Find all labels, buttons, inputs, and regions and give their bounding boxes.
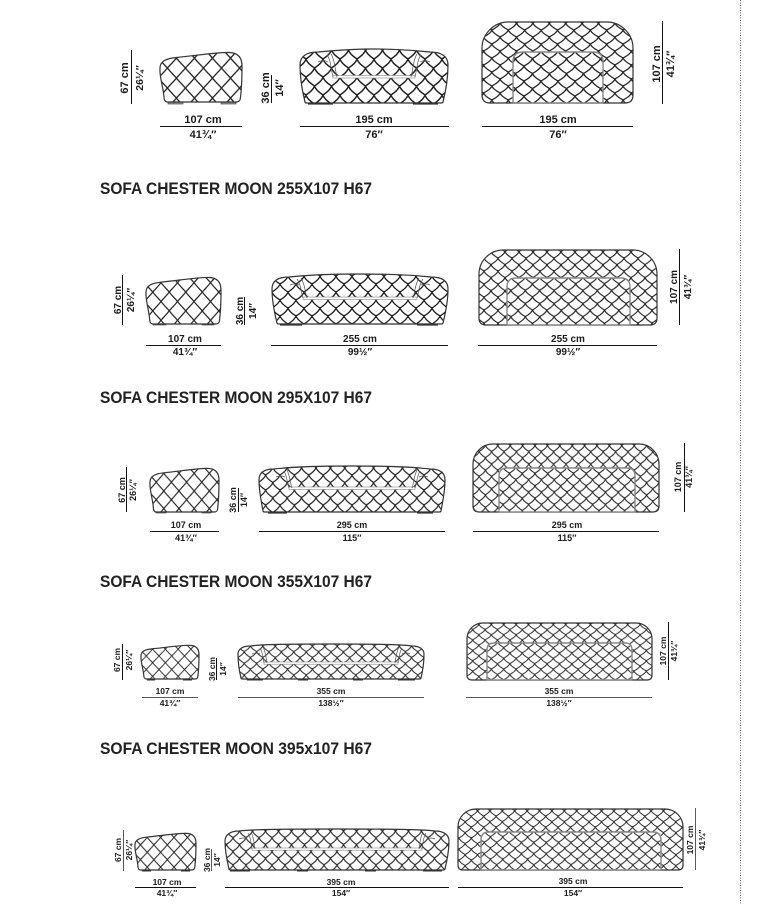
dimensions: top depth 295: 107 cm: [673, 462, 683, 492]
dimensions: side height 195: 26¼″: [134, 65, 146, 91]
dimensions: top width 255: [478, 334, 657, 358]
dimensions: front width 295: [259, 520, 445, 543]
panel: sofa 395x107 row: [113, 808, 707, 898]
dimensions: front width 255: 99½″: [348, 347, 372, 358]
heading: sofa 255: SOFA CHESTER MOON 255X107 H67: [100, 179, 372, 198]
dimensions: side height 195: 67 cm: [119, 62, 131, 94]
dimensions: front width 255: 255 cm: [343, 334, 377, 345]
heading: sofa 355: SOFA CHESTER MOON 355X107 H67: [100, 572, 372, 591]
dimensions: top depth 195: 107 cm: [651, 45, 663, 83]
dimensions: top depth 255: [669, 249, 694, 325]
dimensions: side width 395: 41¾″: [157, 888, 177, 898]
drawing: front view 195: [300, 49, 448, 105]
dimensions: top width 355: [466, 686, 652, 708]
dimensions: top depth 195: 41¾″: [665, 50, 677, 77]
dimensions: seat height 255: 36 cm: [235, 297, 246, 325]
dimensions: seat height 395: 14″: [212, 853, 222, 867]
dimensions: side height 355: [112, 644, 134, 680]
dimensions: side height 355: 67 cm: [112, 648, 122, 672]
dimensions: side height 195: [119, 50, 146, 104]
dimensions: front width 295: 295 cm: [337, 520, 367, 530]
dimensions: side width 395: [135, 877, 196, 898]
drawing: top view 295: [473, 444, 659, 512]
dimensions: side width 355: 107 cm: [156, 686, 185, 696]
dimensions: top width 195: 195 cm: [539, 114, 577, 126]
dimensions: top depth 355: 41¾″: [669, 641, 679, 661]
panel: sofa 195x107 row: [119, 21, 677, 141]
dimensions: seat height 255: 14″: [248, 303, 259, 319]
dimensions: top depth 295: 41¾″: [684, 465, 694, 488]
dimensions: side width 255: 107 cm: [168, 334, 202, 345]
dimensions: front width 395: [225, 877, 449, 898]
dimensions: seat height 395: 36 cm: [202, 848, 212, 872]
dimensions: seat height 355: 14″: [218, 662, 228, 676]
panel: sofa 355x107 row: [112, 622, 679, 708]
dimensions: front width 355: 355 cm: [317, 686, 346, 696]
dimensions: side width 295: 107 cm: [171, 520, 201, 530]
drawing: front view 355: [238, 644, 424, 680]
dimensions: side width 355: [142, 686, 198, 708]
dimensions: top width 255: 99½″: [556, 347, 580, 358]
drawing: side view 195: [160, 52, 242, 104]
dimensions: seat height 395: [202, 848, 222, 872]
dimensions: top depth 395: 41¾″: [697, 830, 707, 850]
heading: sofa 395: SOFA CHESTER MOON 395x107 H67: [100, 739, 372, 758]
dimensions: top depth 395: 107 cm: [685, 825, 695, 854]
dotted page edge line: [740, 0, 742, 905]
dimensions: side width 355: 41¾″: [160, 698, 180, 708]
drawing: top view 355: [467, 623, 652, 680]
dimensions: side width 195: 41¾″: [190, 129, 217, 141]
dimensions: front width 355: 138½″: [318, 698, 344, 708]
dimensions: top depth 195: [651, 21, 677, 104]
panel: sofa 295x107 row: [117, 443, 694, 543]
drawing: front view 295: [259, 466, 445, 514]
dimensions: front width 355: [238, 686, 424, 708]
drawing: front view 255: [272, 274, 448, 326]
dimensions: front width 195: [300, 114, 449, 141]
dimensions: top depth 295: [673, 443, 694, 512]
dimensions: front width 195: 76″: [365, 129, 383, 141]
drawing: top view 395: [458, 809, 683, 870]
dimensions: side width 395: 107 cm: [153, 877, 182, 887]
dimensions: side width 255: 41¾″: [173, 347, 197, 358]
dimensions: top depth 355: 107 cm: [658, 636, 668, 665]
dimensions: top width 355: 138½″: [546, 698, 572, 708]
dimensions: top width 295: [473, 520, 659, 543]
dimensions: seat height 355: 36 cm: [207, 657, 217, 681]
drawing: side view 355: [141, 645, 199, 680]
dimensions: seat height 295: 14″: [239, 492, 249, 507]
dimensions: side width 255: [146, 334, 221, 358]
dimensions: front width 395: 154″: [332, 888, 350, 898]
dimensions: side height 395: 26¼″: [124, 840, 134, 860]
dimensions: front width 395: 395 cm: [327, 877, 356, 887]
dimensions: seat height 195: 14″: [274, 79, 286, 97]
dimensions: top width 395: [458, 876, 683, 898]
dimensions: top width 295: 295 cm: [552, 520, 582, 530]
dimensions: seat height 255: [235, 297, 259, 325]
dimensions: seat height 295: [228, 487, 249, 513]
dimensions: side height 395: [113, 830, 134, 871]
dimensions: side height 295: 26¼″: [128, 478, 138, 501]
dimensions: side height 295: 67 cm: [117, 477, 127, 503]
dimensions: side width 295: [150, 520, 219, 543]
panel: sofa 255x107 row: [113, 249, 694, 358]
dimensions: side height 355: 26¼″: [124, 650, 134, 670]
drawing: top view 255: [479, 250, 657, 325]
dimensions: front width 195: 195 cm: [355, 114, 393, 126]
dimensions: top depth 395: [685, 808, 707, 870]
dimensions: seat height 295: 36 cm: [228, 487, 238, 513]
drawing: side view 255: [146, 277, 221, 325]
dimensions: top width 395: 395 cm: [559, 876, 588, 886]
dimensions: front width 295: 115″: [343, 533, 362, 543]
dimensions: side height 255: [113, 275, 137, 325]
dimensions: top depth 255: 41¾″: [683, 275, 694, 299]
dimensions: seat height 195: [260, 72, 286, 104]
dimensions: top width 195: 76″: [549, 129, 567, 141]
dimensions: top depth 255: 107 cm: [669, 270, 680, 304]
dimensions: top width 355: 355 cm: [545, 686, 574, 696]
dimensions: side height 295: [117, 467, 138, 512]
dimensions: side width 195: [160, 114, 242, 141]
dimensions: side height 255: 67 cm: [113, 286, 124, 314]
dimensions: top width 295: 115″: [558, 533, 577, 543]
dimensions: top depth 355: [658, 622, 679, 680]
dimensions: side height 255: 26¼″: [126, 288, 137, 312]
dimensions: side width 195: 107 cm: [184, 114, 222, 126]
dimensions: top width 195: [482, 114, 633, 141]
dimensions: top width 255: 255 cm: [551, 334, 585, 345]
drawing: front view 395: [225, 829, 449, 872]
dimensions: seat height 355: [207, 657, 228, 681]
dimensions: seat height 195: 36 cm: [260, 72, 272, 104]
drawing: side view 295: [150, 468, 219, 513]
dimensions: side height 395: 67 cm: [113, 838, 123, 862]
drawing: side view 395: [135, 833, 196, 872]
dimensions: side width 295: 41¾″: [175, 533, 198, 543]
heading: sofa 295: SOFA CHESTER MOON 295X107 H67: [100, 388, 372, 407]
dimensions: front width 255: [271, 334, 448, 358]
drawing: top view 195: [482, 22, 633, 103]
dimensions: top width 395: 154″: [564, 888, 582, 898]
